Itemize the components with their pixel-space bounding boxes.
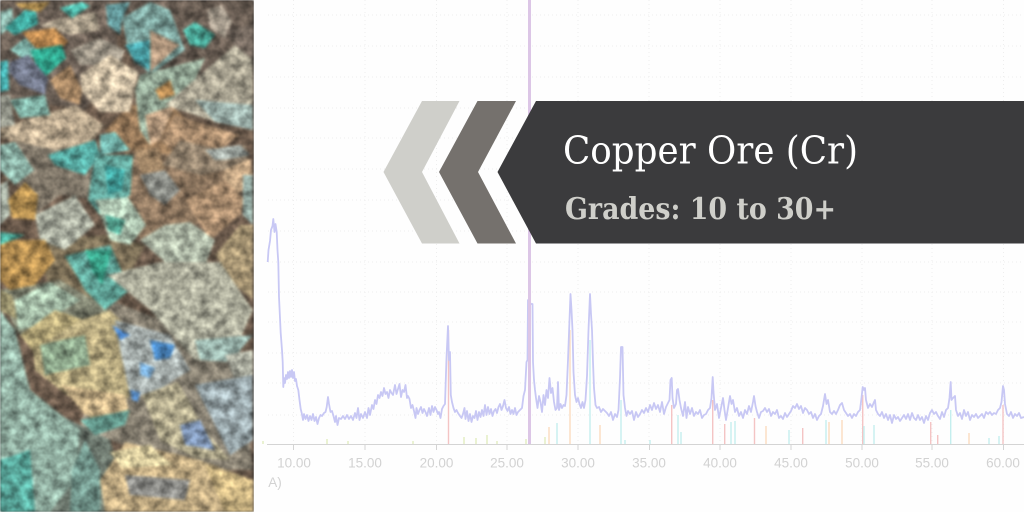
x axis line [267,444,1024,446]
title: Copper Ore (Cr) [563,128,858,172]
chevron: light grey [384,101,460,244]
axis labels: A) [268,475,282,490]
reference peak sticks [263,330,1003,444]
chevron: mid grey [439,101,516,244]
chart: X-ray diffraction pattern [263,0,1024,490]
axis labels: 35.00 [632,456,666,470]
title banner [498,101,1024,244]
axis labels: 30.00 [561,456,595,470]
photo: copper ore rocks [0,0,254,512]
axis ticks [294,444,1004,450]
axis labels: 55.00 [915,456,949,470]
chart grid [268,0,1024,444]
axis labels: 45.00 [774,456,808,470]
axis labels: 10.00 [277,456,311,470]
axis labels: 50.00 [845,456,879,470]
subtitle: grades: Grades: 10 to 30+ [565,192,836,227]
axis labels: 25.00 [490,456,524,470]
axis labels: 15.00 [348,456,382,470]
strong purple peak [528,0,531,444]
diffraction trace [268,219,1024,425]
axis labels: 20.00 [420,456,453,470]
axis labels: 60.00 [986,456,1020,470]
axis labels [268,456,1020,490]
axis labels: 40.00 [703,456,737,470]
